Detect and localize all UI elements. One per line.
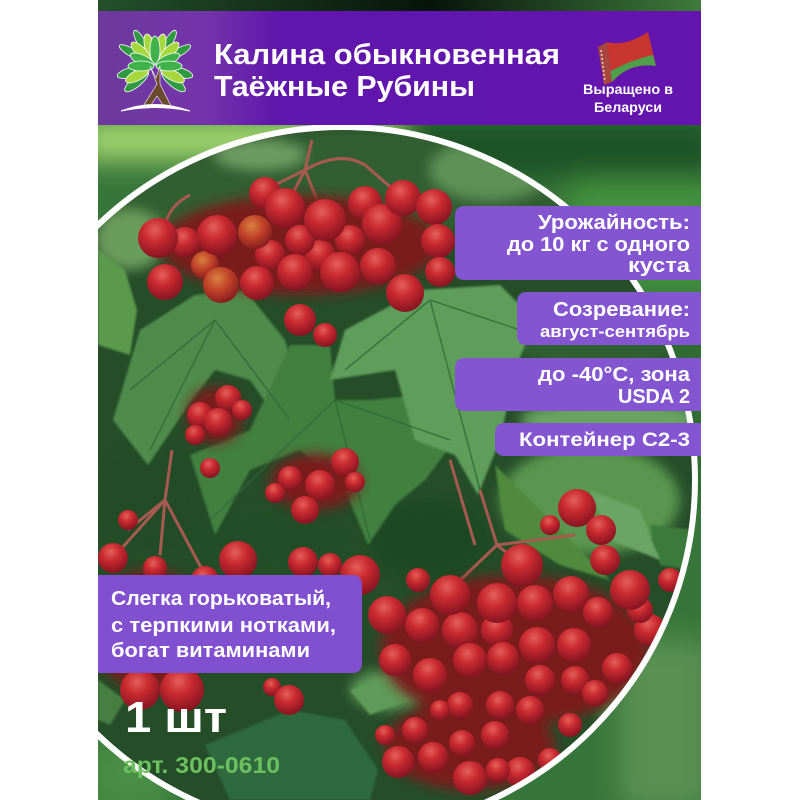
callout: container: Контейнер С2-3 [519, 429, 690, 451]
blurred green background [98, 125, 701, 800]
callout: taste: с терпкими нотками, [111, 615, 336, 637]
background foliage [98, 130, 688, 722]
header band [98, 11, 701, 125]
callout: yield [455, 206, 701, 280]
lower left berry cluster [88, 510, 342, 715]
callout: frost hardiness: USDA 2 [618, 385, 690, 408]
white circular frame [98, 125, 698, 800]
article number: арт. 300-0610 [123, 752, 280, 778]
title: Калина обыкновенная [214, 39, 560, 71]
callout: container [495, 423, 701, 456]
infographic canvas [98, 0, 701, 800]
callout: ripening: август-сентябрь [540, 322, 690, 341]
callout: frost hardiness [455, 358, 701, 411]
callout: ripening: Созревание: [553, 298, 690, 321]
title [214, 39, 560, 103]
flag caption: Выращено в [583, 82, 673, 97]
callout: yield: до 10 кг с одного [507, 233, 690, 256]
title: Таёжные Рубины [214, 71, 475, 103]
middle berry clusters [185, 385, 365, 524]
callout: yield: Урожайность: [538, 211, 690, 234]
callout: taste: Слегка горьковатый, [111, 588, 331, 610]
flag caption: Беларуси [594, 100, 662, 115]
icon: tree logo [116, 28, 194, 111]
callout: taste [98, 575, 362, 673]
stems and veins [113, 140, 575, 590]
top berry cluster [138, 177, 455, 347]
leaves [98, 250, 695, 800]
quantity: 1 шт [125, 693, 227, 742]
callout: ripening [517, 292, 701, 345]
flag caption [583, 82, 673, 115]
callout: yield: куста [628, 254, 691, 277]
callout: frost hardiness: до -40°C, зона [538, 363, 691, 386]
icon: Belarus flag [598, 32, 656, 85]
dark backing behind berry clusters [160, 195, 650, 790]
callout: taste: богат витаминами [111, 640, 310, 662]
top dark strip [98, 0, 701, 11]
photo: viburnum branches in circular frame [98, 130, 692, 800]
lower right berry cluster [340, 489, 682, 795]
